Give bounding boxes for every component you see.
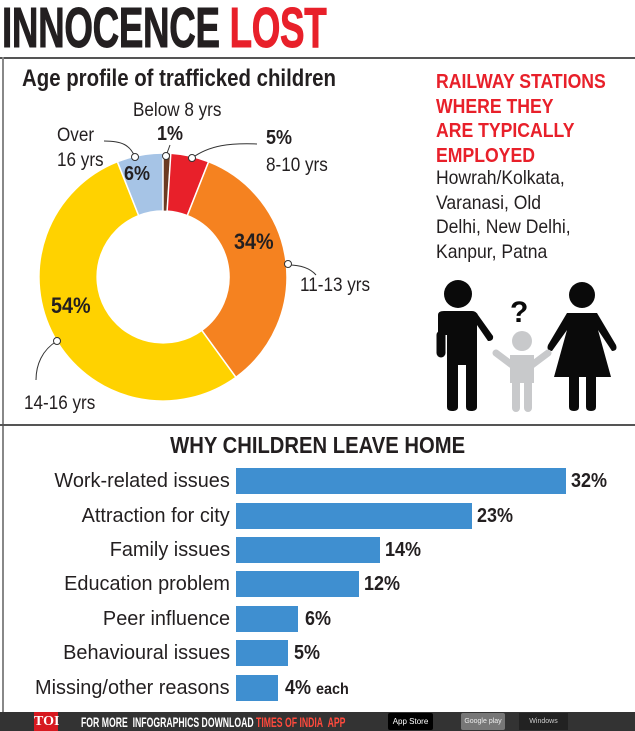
railway stations text: EMPLOYED	[436, 144, 535, 166]
footer: TOI	[34, 714, 59, 729]
bar chart: Family issues	[110, 538, 230, 561]
railway stations text: Kanpur, Patna	[436, 240, 547, 262]
donut labels: Over	[57, 125, 94, 146]
bar chart: Missing/other reasons	[35, 676, 230, 699]
bar chart: 14%	[385, 539, 421, 561]
bar chart: 4% each	[285, 677, 349, 699]
donut labels: 5%	[266, 127, 292, 149]
railway stations text: RAILWAY STATIONS	[436, 70, 606, 93]
railway stations text: ARE TYPICALLY	[436, 119, 574, 142]
bar chart: 6%	[305, 608, 331, 630]
donut chart	[36, 140, 316, 400]
bar chart: 5%	[294, 642, 320, 664]
donut labels: 1%	[157, 123, 183, 145]
donut labels: 14-16 yrs	[24, 393, 95, 414]
divider lines	[0, 57, 635, 59]
bar chart: 12%	[364, 573, 400, 595]
donut labels: 54%	[51, 293, 91, 318]
footer: Google play	[464, 718, 502, 725]
donut labels: 16 yrs	[57, 150, 104, 171]
bar chart: Behavioural issues	[63, 641, 230, 664]
railway stations text: Varanasi, Old	[436, 192, 541, 214]
footer	[0, 712, 635, 731]
footer: Windows	[529, 718, 558, 725]
footer: App Store	[393, 717, 428, 726]
bar chart: 23%	[477, 505, 513, 527]
bar chart: Peer influence	[103, 607, 230, 630]
donut labels: 8-10 yrs	[266, 155, 328, 176]
footer: FOR MORE INFOGRAPHICS DOWNLOAD TIMES OF INDIA APP	[81, 714, 345, 730]
donut labels	[24, 100, 370, 414]
heading: age profile: Age profile of trafficked children	[22, 65, 336, 92]
donut labels: 11-13 yrs	[300, 275, 370, 296]
bar chart: Work-related issues	[55, 469, 230, 492]
heading: why children leave home: WHY CHILDREN LEAVE HOME	[170, 432, 465, 458]
icon: family figures	[436, 280, 616, 412]
bar chart: Attraction for city	[82, 504, 230, 527]
donut labels: Below 8 yrs	[133, 100, 221, 121]
icon: family figures: ?	[510, 296, 528, 329]
bar chart: Education problem	[64, 572, 230, 595]
railway stations text: Delhi, New Delhi,	[436, 216, 571, 238]
railway stations text	[436, 70, 606, 262]
donut labels: 34%	[234, 229, 274, 254]
donut labels: 6%	[124, 163, 150, 185]
railway stations text: WHERE THEY	[436, 94, 554, 118]
railway stations text: Howrah/Kolkata,	[436, 167, 565, 189]
bar chart: 32%	[571, 470, 607, 492]
bar chart	[35, 468, 607, 701]
